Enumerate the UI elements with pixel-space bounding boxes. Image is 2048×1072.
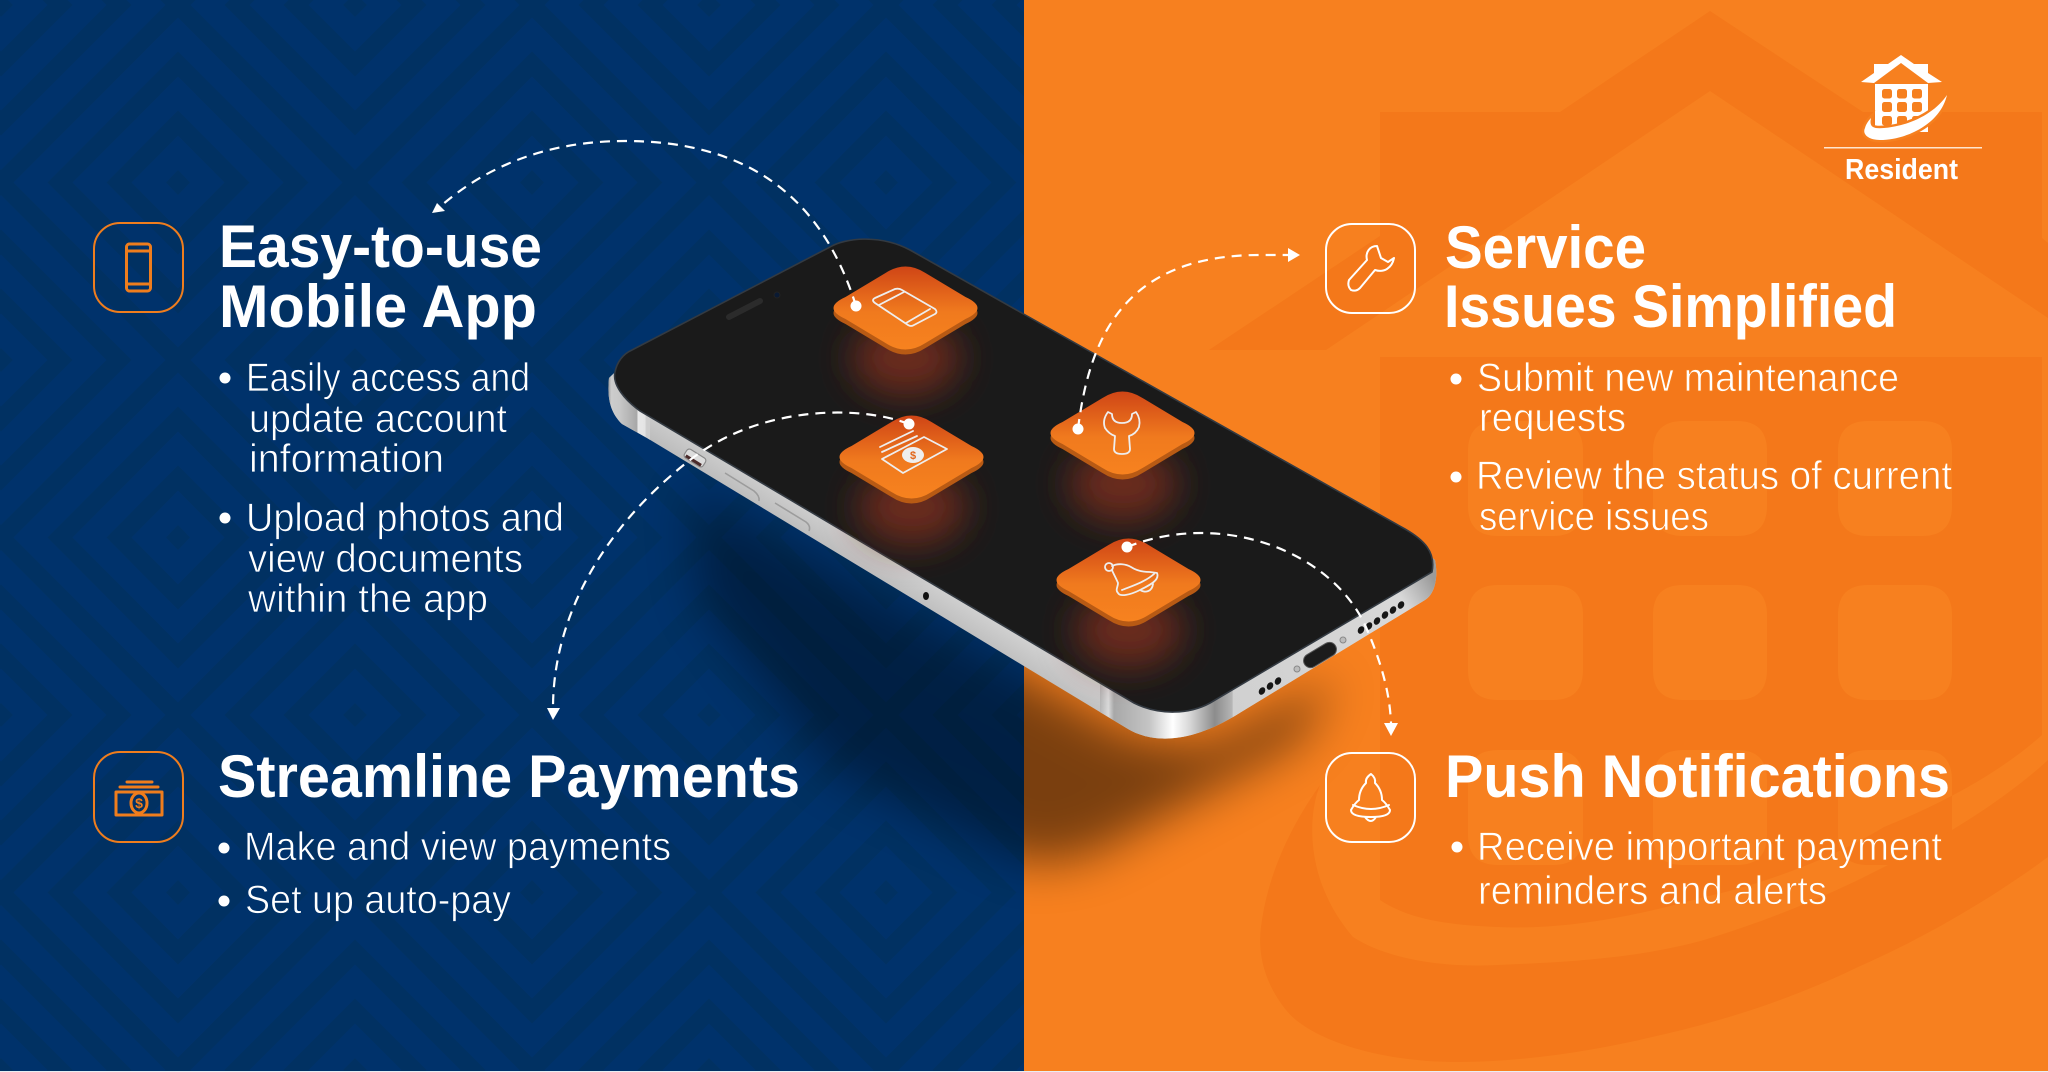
bullet list: Make and view payments: [244, 825, 671, 869]
phone charging port: [1301, 640, 1339, 670]
logo building: [1875, 84, 1928, 132]
bullet list: service issues: [1479, 495, 1709, 539]
bullet list: within the app: [247, 577, 488, 621]
arrow: notifications tile to Push Notifications: [1122, 533, 1398, 736]
phone drop shadow: [690, 490, 1335, 865]
phone earpiece: [729, 301, 760, 317]
panel: orange background: [1024, 0, 2048, 1072]
section: Service Issues Simplified: [1326, 214, 1952, 539]
bullet list: Review the status of current: [1476, 454, 1952, 498]
bullet list: Set up auto-pay: [245, 878, 511, 922]
heading: Mobile App: [219, 273, 537, 340]
panel: navy background with diamond pattern: [0, 0, 1024, 1072]
heading: Issues Simplified: [1444, 273, 1897, 340]
phone side buttons: [725, 473, 810, 531]
bullet list: Upload photos and: [246, 496, 564, 540]
watermark: house and swoosh: [1209, 11, 2048, 1062]
bullet list: [1452, 825, 1942, 913]
icon: mobile phone: [94, 223, 183, 312]
bullet list: update account: [249, 397, 507, 441]
heading: [1444, 214, 1897, 340]
section: Streamline Payments: [94, 743, 800, 922]
app tile: payments: $: [910, 450, 916, 462]
phone camera: [774, 292, 780, 298]
heading: Streamline Payments: [218, 743, 800, 810]
phone speaker holes: [1257, 600, 1406, 696]
app tile: mobile: [834, 266, 978, 396]
bullet list: requests: [1479, 396, 1626, 440]
arrow: phone tile to Easy-to-use Mobile App: [432, 141, 862, 312]
logo swoosh: [1864, 95, 1947, 140]
bullet list: Submit new maintenance: [1477, 356, 1899, 400]
logo wordmark: Resident: [1845, 154, 1958, 186]
section: Push Notifications: [1326, 743, 1950, 913]
bullet list: Easily access and: [246, 356, 530, 400]
logo: Resident: [1824, 55, 1982, 186]
bullet list: [1450, 356, 1952, 539]
heading: Easy-to-use: [219, 213, 542, 280]
bullet list: information: [249, 437, 444, 481]
phone screen: [615, 239, 1433, 712]
phone screws: [1294, 637, 1346, 672]
arrow: payments tile to Streamline Payments: [547, 413, 914, 720]
heading: Push Notifications: [1445, 743, 1950, 810]
phone: [604, 239, 1440, 750]
bullet list: view documents: [248, 537, 523, 581]
arrow: service tile to Service Issues Simplified: [1072, 248, 1300, 434]
app tile: notifications: [1056, 538, 1200, 668]
logo divider: [1824, 147, 1982, 148]
app tile: service: [1050, 392, 1194, 522]
icon: money: [94, 752, 183, 842]
heading: [219, 213, 542, 340]
bullet list: reminders and alerts: [1478, 869, 1827, 913]
icon: money: $: [135, 795, 143, 811]
icon: wrench: [1326, 224, 1415, 313]
icon: bell: [1326, 753, 1415, 842]
heading: Service: [1445, 214, 1646, 281]
bullet list: [218, 825, 671, 922]
section: Easy-to-use Mobile App: [94, 213, 564, 621]
phone bottom microphone: [923, 592, 929, 600]
bullet list: [220, 356, 564, 621]
bullet list: Receive important payment: [1477, 825, 1942, 869]
app tile: payments: [840, 416, 984, 545]
logo house: [1861, 55, 1942, 83]
phone silent switch: [683, 448, 707, 468]
phone body: [608, 254, 1436, 739]
